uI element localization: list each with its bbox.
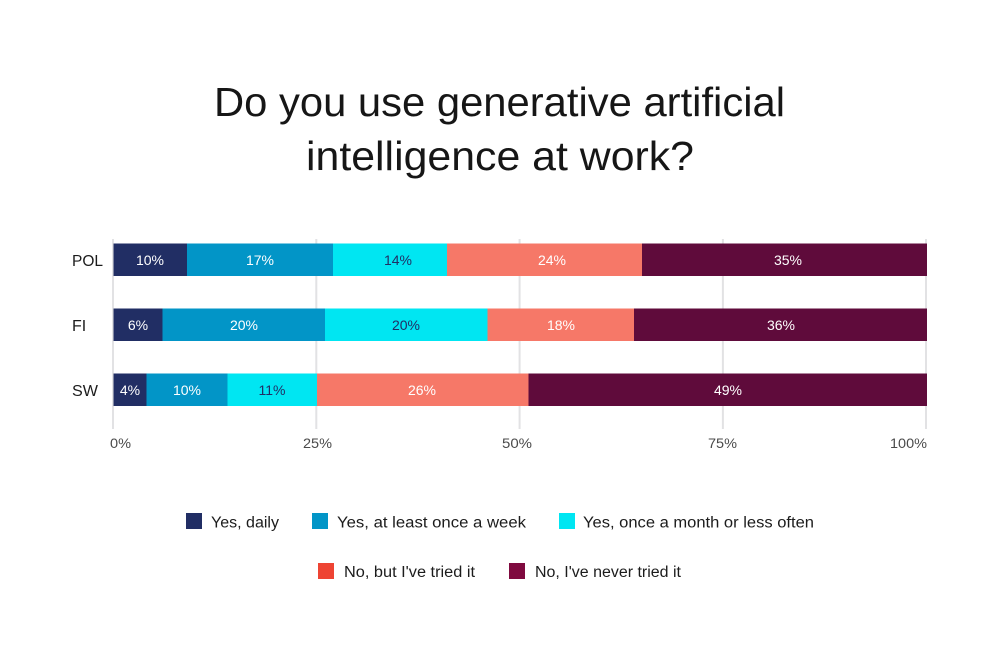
legend item: Yes, once a month or less often: Yes, once a month or less often bbox=[583, 514, 814, 532]
title: Do you use generative artificial bbox=[214, 79, 785, 125]
legend bbox=[186, 513, 814, 581]
legend item: No, but I've tried it: No, but I've tried it bbox=[344, 564, 476, 581]
row: POL bbox=[114, 244, 927, 276]
title bbox=[214, 79, 785, 179]
row: POL: 35% bbox=[774, 252, 802, 268]
row: SW: 10% bbox=[173, 382, 201, 398]
row: FI: 20% bbox=[230, 317, 258, 333]
title: intelligence at work? bbox=[306, 133, 694, 179]
legend item: Yes, at least once a week: Yes, at least once a week bbox=[337, 514, 526, 532]
row: FI bbox=[114, 308, 927, 341]
row: SW: 4% bbox=[120, 382, 140, 398]
x axis labels: 50% bbox=[502, 435, 532, 451]
category labels: FI bbox=[72, 318, 86, 335]
row: SW: 11% bbox=[259, 382, 285, 398]
row: POL: 24% bbox=[538, 252, 566, 268]
x axis labels: 25% bbox=[303, 435, 332, 451]
row: SW: 26% bbox=[408, 382, 436, 398]
row: FI: 36% bbox=[767, 317, 795, 333]
x axis labels: 0% bbox=[110, 435, 131, 451]
row: FI: 6% bbox=[128, 317, 148, 333]
category labels: POL bbox=[72, 253, 103, 270]
row: FI: 20% bbox=[392, 317, 420, 333]
row: SW: 49% bbox=[714, 382, 742, 398]
x axis labels: 75% bbox=[708, 435, 737, 451]
legend item: Yes, daily bbox=[186, 513, 279, 532]
x axis labels bbox=[110, 435, 927, 451]
stacked bar chart bbox=[114, 244, 927, 406]
category labels bbox=[72, 253, 103, 400]
category labels: SW bbox=[72, 383, 99, 400]
legend item: Yes, daily: Yes, daily bbox=[211, 514, 279, 532]
row: POL: 10% bbox=[136, 252, 164, 268]
row: SW bbox=[114, 374, 927, 406]
row: POL: 14% bbox=[384, 252, 412, 268]
row: FI: 18% bbox=[547, 317, 575, 333]
x axis labels: 100% bbox=[890, 435, 927, 451]
row: POL: 17% bbox=[246, 252, 274, 268]
legend item: No, I've never tried it: No, I've never tried it bbox=[535, 564, 682, 581]
